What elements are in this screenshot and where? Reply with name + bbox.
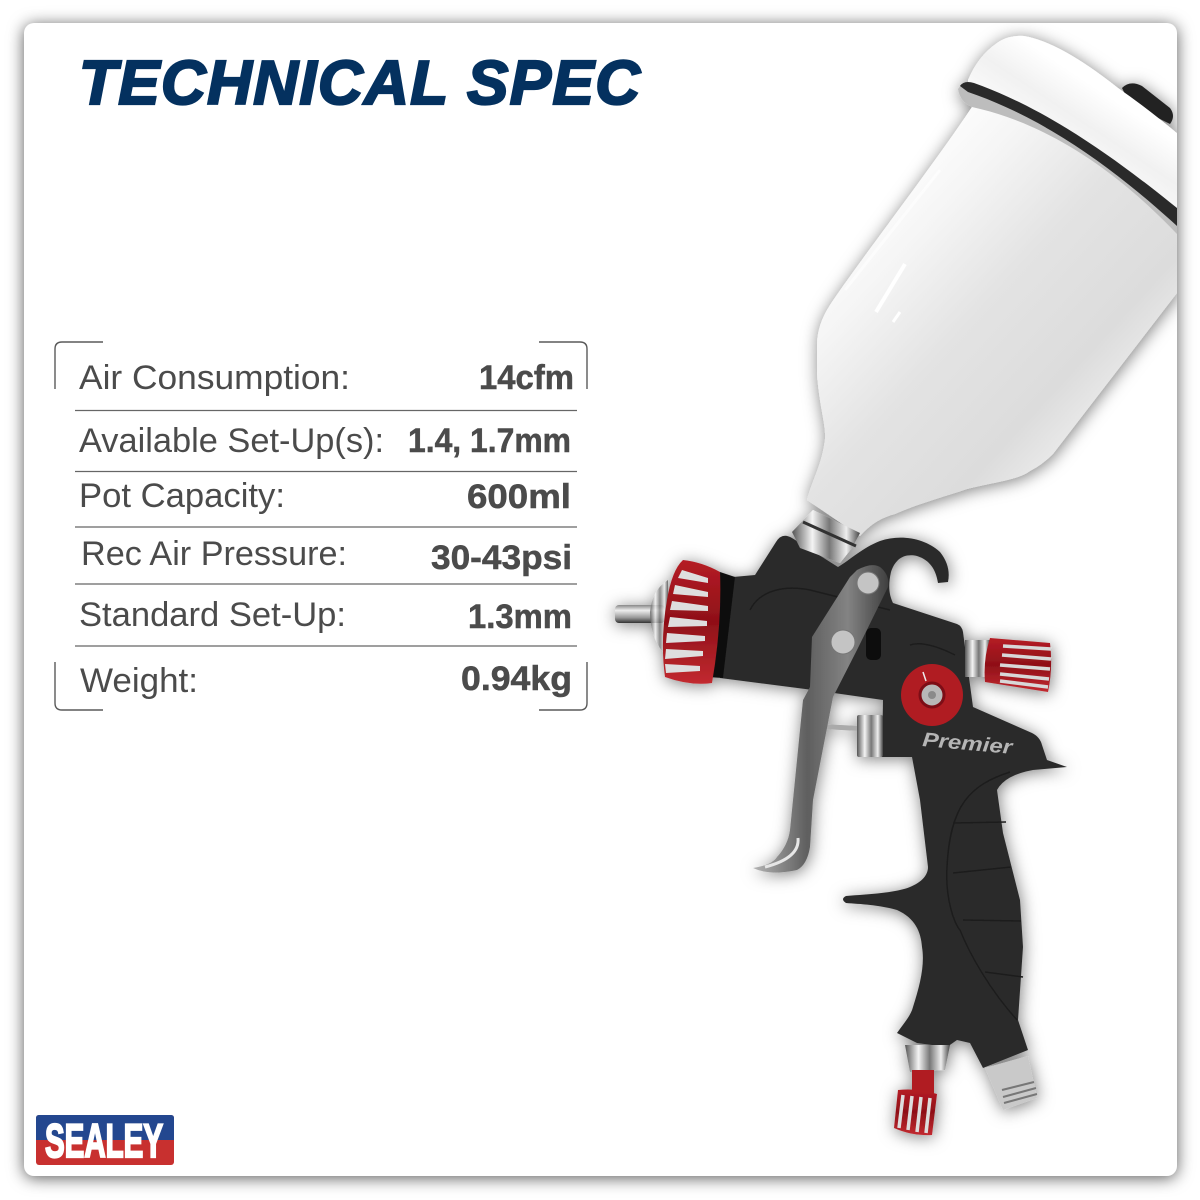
lever pins: [831, 572, 879, 654]
Premier branding: Premier: [922, 729, 1015, 759]
rear red knob: [985, 638, 1051, 692]
row: air consumption: 14cfm: [479, 359, 574, 397]
pot sealing band: [958, 84, 1177, 234]
rod and packing nut: [822, 715, 883, 757]
row: pot capacity: [79, 477, 571, 516]
row: standard set-up: 1.3mm: [468, 598, 572, 636]
row: weight: Weight:: [80, 662, 198, 700]
panel: specification table: [55, 342, 587, 710]
logo: Sealey: SEALEY: [45, 1114, 163, 1167]
gravity pot body: [807, 100, 1177, 536]
row: air consumption: Air Consumption:: [79, 359, 350, 397]
air cap dome: [650, 580, 668, 658]
row: available set-ups: Available Set-Up(s):: [79, 422, 384, 460]
round red adjuster knob: [901, 664, 963, 726]
row: pot capacity: 600ml: [467, 478, 571, 516]
row: available set-ups: [79, 422, 571, 460]
pot highlight: [874, 264, 906, 323]
trigger lever: [753, 565, 888, 873]
corner brackets: [55, 342, 587, 710]
nozzle needle: [615, 605, 665, 623]
front red collar: [663, 560, 720, 684]
row: recommended air pressure: 30-43psi: [431, 539, 572, 577]
black spacer ring: [708, 572, 735, 678]
row: standard set-up: [79, 596, 572, 636]
row: pot capacity: Pot Capacity:: [79, 477, 285, 515]
gravity pot lid: [968, 36, 1185, 225]
bottom hex nut: [905, 1045, 950, 1072]
row: available set-ups: 1.4, 1.7mm: [408, 422, 571, 460]
gun body: [720, 536, 1067, 1068]
row: recommended air pressure: Rec Air Pressure:: [81, 535, 347, 573]
row: air consumption: [79, 359, 574, 397]
neck fitting: [792, 510, 860, 563]
title: TECHNICAL SPEC: [79, 49, 641, 118]
bottom red valve stem: [912, 1070, 934, 1094]
air inlet fitting: [985, 1056, 1037, 1110]
logo: Sealey: [36, 1114, 174, 1167]
row: weight: [80, 660, 572, 700]
rear chrome connector: [965, 640, 990, 677]
row: weight: 0.94kg: [461, 660, 572, 698]
grip contour: [750, 588, 1023, 1020]
pot lid knob: [1122, 83, 1173, 124]
row: recommended air pressure: [81, 535, 572, 577]
bottom red knob: [894, 1090, 937, 1135]
row: standard set-up: Standard Set-Up:: [79, 596, 346, 634]
product: spray gun: [615, 36, 1185, 1135]
dark trigger slot: [866, 628, 881, 660]
